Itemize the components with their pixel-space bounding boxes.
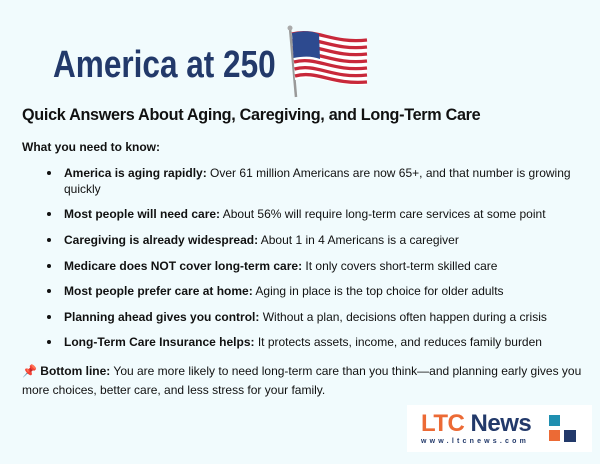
text: what you need to know: What you need to know: (22, 140, 160, 154)
bullet 5: Most people prefer care at home: Aging in place is the top choice for older adults (64, 284, 504, 298)
logo: LTC News: www.ltcnews.com (421, 438, 529, 445)
bullet 2: Most people will need care: About 56% will require long-term care services at some point (64, 207, 546, 221)
bullet 3: Caregiving is already widespread: About 1 in 4 Americans is a caregiver (64, 233, 459, 247)
logo: LTC News: LTC News (421, 410, 531, 437)
bullet 6: Planning ahead gives you control: Without a plan, decisions often happen during a crisis (64, 310, 547, 324)
icon: flag (288, 26, 368, 98)
bullet 7: Long-Term Care Insurance helps: It protects assets, income, and reduces family burden (64, 335, 542, 349)
bottom line: 📌 Bottom line: You are more likely to need long-term care than you think—and planning early gives you more choices, better care, and less stress for your family. (22, 364, 581, 397)
logo: LTC News (407, 405, 592, 452)
bullet 1: America is aging rapidly: Over 61 million Americans are now 65+, and that number is growing quickly (64, 166, 571, 196)
title: America at 250 (53, 44, 276, 86)
bullet 4: Medicare does NOT cover long-term care: It only covers short-term skilled care (64, 259, 497, 273)
subtitle: Quick Answers About Aging, Caregiving, and Long-Term Care (22, 106, 480, 124)
